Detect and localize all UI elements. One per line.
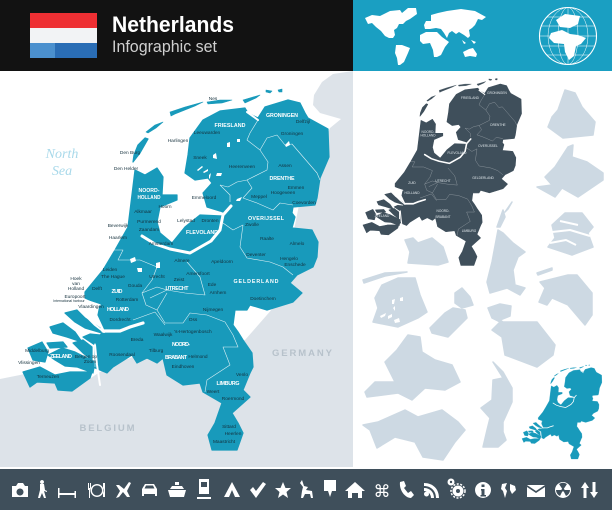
province labels: UTRECHT (166, 286, 189, 292)
city labels: Purmerend (137, 219, 161, 225)
province: Overijssel (488, 304, 555, 367)
city labels: Zaandam (139, 227, 159, 233)
province: Gelderland (365, 335, 460, 400)
city labels: Hoek (70, 276, 82, 282)
province: Groningen (537, 268, 592, 325)
city labels: Ede (208, 282, 217, 288)
city labels: Eindhoven (172, 364, 195, 370)
province labels: FRIESLAND (214, 123, 246, 129)
city labels: Amsterdam (149, 241, 173, 247)
icon: bed (58, 488, 76, 498)
province: Limburg (481, 362, 512, 447)
city labels: Lelystad (177, 218, 195, 224)
city labels: Apeldoorn (211, 259, 233, 265)
header: black title band (0, 0, 353, 71)
dark map labels: GELDERLAND (472, 176, 494, 180)
province: Friesland (363, 272, 427, 327)
icon: train (197, 479, 211, 499)
province labels (50, 113, 298, 387)
dark map labels: UTRECHT (435, 179, 451, 183)
icon: phone (400, 481, 414, 498)
icon: deer (300, 480, 313, 498)
city labels: Beverwijk (108, 223, 129, 229)
province labels: ZUID (112, 289, 123, 295)
city labels: Dordrecht (109, 317, 131, 323)
city labels: Middelburg (25, 348, 49, 354)
city labels: Zeist (174, 277, 185, 283)
icon: plane (116, 482, 131, 498)
city labels: Waalwijk (154, 332, 173, 338)
city labels: Zoom (84, 359, 96, 365)
panel: dark regions map (363, 78, 522, 265)
city labels: Deventer (246, 252, 266, 258)
icon: info (475, 482, 491, 498)
blue locator map (522, 365, 602, 459)
city labels: Venlo (236, 372, 248, 378)
province labels: OVERIJSSEL (248, 216, 285, 222)
province labels: FLEVOLAND (186, 230, 218, 236)
icon: up and down arrows (581, 482, 598, 498)
icon: mail (527, 485, 545, 497)
province: Zeeland (548, 213, 593, 255)
city labels: Meppel (251, 194, 267, 200)
province: Zuid-Holland (537, 145, 603, 197)
panel: main map background (0, 71, 353, 467)
dark map labels: NOORD- (422, 130, 434, 134)
city labels: Gouda (128, 283, 143, 289)
icon: camera (12, 483, 28, 497)
city labels: Leiden (103, 267, 118, 273)
city labels: Vlissingen (18, 360, 40, 366)
province labels: BRABANT (165, 355, 188, 361)
city labels: 's-Hertogenbosch (174, 329, 212, 335)
icon: command: ⌘ (374, 482, 390, 502)
dark map labels: GRONINGEN (487, 91, 508, 95)
city labels: Oss (189, 317, 198, 323)
neighbouring land: Germany and Belgium (0, 71, 353, 467)
city labels: Holland (68, 286, 84, 292)
dark map labels: OVERIJSSEL (478, 144, 498, 148)
dark map labels: FRIESLAND (461, 96, 480, 100)
city labels: Sneek (193, 155, 207, 161)
city labels: Maastricht (213, 439, 236, 445)
dark map labels: FLEVOLAND (448, 151, 467, 155)
city labels: Hengelo (280, 256, 298, 262)
globe (540, 8, 596, 64)
city labels: van (72, 282, 80, 287)
city labels: Rotterdam (116, 297, 138, 303)
main Netherlands map (18, 89, 329, 450)
sea label (45, 147, 78, 179)
city labels: Alkmaar (134, 209, 152, 215)
dark map labels: DRENTHE (490, 123, 506, 127)
city labels: Amersfoort (186, 271, 210, 277)
city labels: Heerenveen (229, 164, 255, 170)
city labels: Delft (92, 286, 103, 292)
country labels: BELGIUM (80, 423, 135, 434)
city labels: Europoort (64, 294, 86, 300)
city labels: Terneuzen (37, 374, 60, 380)
world map (365, 8, 486, 65)
subtitle: Infographic set (112, 37, 217, 56)
city labels: Raalte (260, 236, 274, 242)
city labels: Almere (174, 258, 190, 264)
city labels: Coevorden (292, 200, 316, 206)
dark map labels: HOLLAND (404, 191, 420, 195)
country labels: GERMANY (272, 348, 333, 359)
dark map labels (375, 91, 508, 233)
city labels: Sittard (222, 424, 236, 430)
city labels: Nes (209, 96, 218, 102)
city labels: Groningen (281, 131, 304, 137)
country labels (80, 348, 333, 434)
city labels: Roermond (222, 396, 245, 402)
province silhouettes (363, 90, 603, 460)
city labels: Enschede (284, 262, 306, 268)
icon: comment (324, 480, 336, 497)
province: Utrecht (405, 238, 448, 265)
province: Flevoland (430, 308, 467, 337)
title: Netherlands (112, 12, 234, 37)
province labels: ZEELAND (50, 354, 72, 360)
city labels (18, 96, 316, 445)
icon: tent (224, 482, 240, 497)
province: Noordoostpolder (455, 288, 473, 308)
city labels: Den Helder (114, 166, 139, 172)
province labels: NOORD- (172, 342, 190, 348)
icon: ship (168, 482, 186, 497)
icon: walker (38, 480, 47, 498)
city labels: Almelo (290, 241, 305, 247)
city labels: Harlingen (168, 138, 189, 144)
city labels: Bergen op (75, 354, 97, 360)
province labels: DRENTHE (270, 176, 295, 182)
icon: star (275, 482, 291, 498)
icon: rss (424, 483, 439, 498)
city labels: Den Burg (120, 150, 140, 156)
province labels: NOORD- (138, 188, 160, 194)
province labels: GELDERLAND (234, 279, 279, 285)
city labels: Hoorn (158, 204, 172, 210)
header: blue locator band (353, 0, 612, 71)
city labels: Haarlem (109, 235, 127, 241)
icon: house (345, 482, 365, 498)
province labels: LIMBURG (216, 381, 240, 387)
sea label: Sea (52, 164, 72, 179)
footer icon bar (0, 469, 612, 510)
city labels: Doetinchem (250, 296, 276, 302)
city labels: Vlaardingen (78, 304, 104, 310)
icon: gears (448, 478, 465, 498)
dark map labels: LIMBURG (462, 229, 477, 233)
province: Drenthe (548, 90, 595, 138)
flag of the Netherlands (30, 13, 97, 58)
city labels: Tilburg (149, 348, 164, 354)
city labels: The Hague (101, 274, 125, 280)
icon: car (142, 484, 157, 496)
dark map labels: ZEELAND (375, 214, 390, 218)
city labels: Dronten (201, 218, 219, 224)
province: Noord-Brabant (363, 410, 465, 460)
city labels: Breda (131, 337, 144, 343)
city labels: Emmen (288, 185, 305, 191)
city labels: Assen (278, 163, 292, 169)
city labels: International harbour (53, 299, 86, 303)
city labels: Heerlen (225, 431, 242, 437)
city labels: Hoogeveen (271, 190, 296, 196)
province labels: GRONINGEN (266, 113, 298, 119)
dark map labels: ZUID (408, 181, 416, 185)
dark map labels: HOLLAND (420, 134, 436, 138)
dark map labels: BRABANT (435, 215, 451, 219)
province labels: HOLLAND (107, 307, 129, 313)
icon: check (250, 482, 266, 498)
sea label: North (45, 147, 78, 162)
city labels: Delfzijl (296, 119, 310, 125)
city labels: Leeuwarden (194, 130, 221, 136)
city labels: Helmond (188, 354, 208, 360)
city labels: Utrecht (149, 274, 165, 280)
dark map labels: NOORD- (437, 209, 449, 213)
city labels: Zwolle (245, 222, 259, 228)
city labels: Emmeloord (192, 195, 217, 201)
city labels: Roosendaal (109, 352, 135, 358)
city labels: Arnhem (210, 290, 226, 296)
province: Noord-Holland (487, 202, 525, 295)
icon: footprints globe (501, 483, 516, 498)
icon: cutlery (88, 483, 105, 498)
province labels: HOLLAND (138, 195, 161, 201)
city labels: Nijmegen (203, 307, 223, 313)
city labels: Weert (207, 389, 220, 395)
icon: radiation (555, 482, 571, 498)
